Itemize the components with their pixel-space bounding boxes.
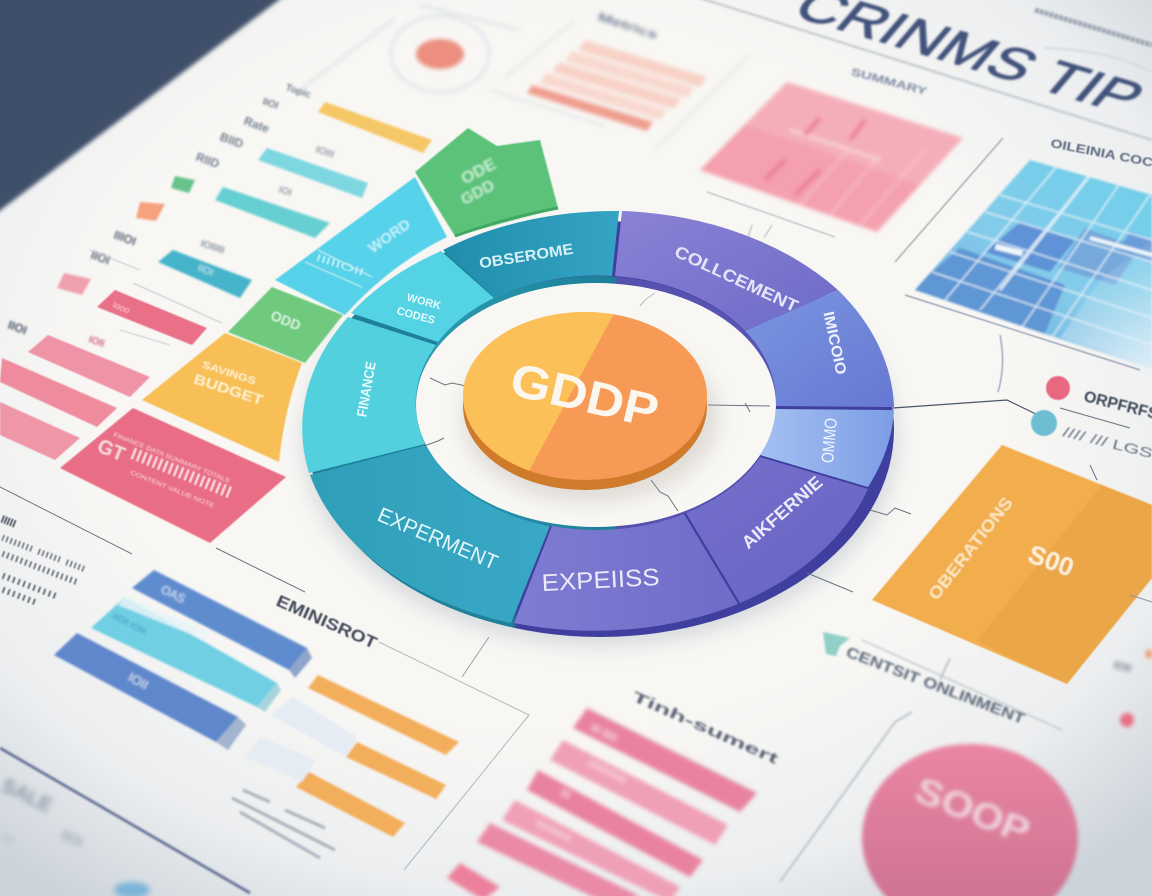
left labels column: IOI bbox=[277, 184, 293, 199]
label: cyan left: FINANCE bbox=[353, 360, 379, 418]
panel: large pink card: IIIIIIIIIIIIIIIIIII bbox=[128, 444, 235, 502]
left labels column: IIOI bbox=[6, 318, 29, 337]
panel: green lower tab: ODD bbox=[268, 307, 303, 334]
left labels column bbox=[6, 82, 336, 350]
panel: large pink card: GT bbox=[94, 435, 128, 466]
panel: pink list: IIIIIIIIIIIIII bbox=[534, 818, 573, 845]
left labels column: IIOI bbox=[261, 96, 280, 112]
bars: light pink bbox=[0, 250, 222, 460]
panel: pink list: III IIIII bbox=[589, 722, 619, 745]
left small icons bbox=[57, 176, 195, 295]
panel: green lower tab bbox=[228, 287, 343, 363]
left caption text: IIIIIIIIIIIIIIIII bbox=[0, 549, 79, 587]
panel: blue heat map bbox=[905, 160, 1152, 368]
segment: purple top right bbox=[615, 211, 838, 331]
bar: dark teal: IIOI bbox=[196, 263, 215, 279]
segment: teal bottom left bbox=[310, 445, 550, 623]
panel: pink heat map bbox=[700, 82, 963, 232]
title rule lines bbox=[700, 0, 1152, 140]
bar: teal bbox=[215, 187, 330, 238]
panel: pink list: IIIIIIIIIIIIIII bbox=[586, 758, 628, 787]
panel: blue bars: IOII bbox=[126, 669, 151, 692]
orange card connector bbox=[1130, 595, 1152, 602]
label: collcement: COLLCEMENT bbox=[672, 242, 802, 316]
bottom left blurred notes bbox=[0, 775, 150, 896]
left caption text bbox=[0, 514, 87, 607]
label: light blue: OMMO bbox=[818, 417, 841, 464]
label: expenses: EXPEIISS bbox=[541, 564, 660, 597]
icon: teal marker bbox=[823, 632, 850, 656]
label: teal: EXPERMENT bbox=[374, 503, 501, 575]
connector: lower right bbox=[870, 508, 911, 515]
bar: yellow bbox=[318, 102, 432, 153]
center disc: GDDP bbox=[460, 310, 718, 502]
label: periwinkle: IMICOIO bbox=[819, 310, 849, 376]
disc label: GDDP bbox=[506, 352, 664, 438]
segment: teal top bbox=[443, 211, 619, 298]
right edge blurred notes: IOII bbox=[1112, 659, 1132, 675]
panel: orange bars bbox=[232, 675, 459, 858]
right legend: //// /// LGS bbox=[1061, 423, 1152, 461]
ring inner wall bbox=[416, 276, 776, 530]
bar: light teal bbox=[258, 148, 368, 198]
segment: purple bottom bbox=[514, 514, 738, 631]
panel: cyan fan: WORD bbox=[365, 216, 414, 257]
panel: orange card bbox=[872, 445, 1152, 684]
icon: pink marker bbox=[1046, 376, 1070, 400]
segment: cyan left bbox=[302, 317, 436, 473]
panel: yellow trapezoid bbox=[142, 333, 302, 462]
blue panel label: OILEINIA COC bbox=[1049, 136, 1152, 170]
label: cyan upper: WORK bbox=[405, 292, 442, 312]
lines around bars bbox=[0, 487, 529, 870]
icon: blue dot bbox=[1031, 410, 1057, 436]
label: cyan upper bbox=[395, 292, 442, 327]
panel: lower right heading bbox=[823, 632, 1062, 730]
panel: blue bars: IIOII IOIII bbox=[111, 611, 148, 636]
pink panel label: SUMMARY bbox=[850, 66, 929, 98]
lower right axis line bbox=[780, 712, 912, 882]
pink panel axis lines bbox=[707, 138, 1003, 262]
left labels column: RIID bbox=[194, 150, 222, 171]
panel: salmon bars bbox=[490, 10, 750, 150]
panel: pink circle bbox=[862, 744, 1078, 896]
panel: large pink card: CONTENT VALUE NOTE bbox=[129, 470, 215, 510]
segment: purple lower right bbox=[686, 457, 868, 603]
left labels column: IOII bbox=[87, 334, 106, 350]
segment: light blue bbox=[760, 409, 894, 487]
bar: pink: Iooo bbox=[111, 300, 131, 315]
left labels column: BIID bbox=[218, 130, 246, 151]
donut ring bbox=[302, 211, 894, 637]
bottom left blurred notes: IIOI bbox=[59, 826, 86, 850]
sheet edge line bottom left bbox=[0, 748, 250, 893]
bar: dark teal bbox=[158, 250, 252, 298]
panel: blue bars bbox=[54, 570, 312, 750]
dark desk corner bbox=[0, 0, 292, 218]
left labels column: Topic bbox=[284, 82, 313, 101]
heading: Eminisrot: EMINISROT bbox=[273, 591, 380, 653]
panel: green top tab bbox=[415, 128, 558, 236]
panel: top circle gauge bbox=[300, 5, 520, 92]
panel: large pink card: FINANCE DATA SUMMARY TOTALS bbox=[112, 432, 230, 485]
left labels column: IOIII bbox=[314, 144, 336, 161]
blue panel axis lines bbox=[905, 295, 1140, 392]
panel: salmon bars: Metrics bbox=[596, 10, 660, 42]
panel: large pink card bbox=[60, 408, 286, 543]
left labels column: IOIIIII bbox=[199, 238, 226, 256]
hub connector lines bbox=[424, 293, 770, 511]
panel: cyan fan: IIIIIOII bbox=[314, 253, 365, 279]
panel: pink circle: SOOP bbox=[909, 769, 1036, 852]
panel: blue bars: OAS bbox=[159, 582, 188, 606]
disc edge bbox=[463, 322, 707, 490]
ring base edge bbox=[306, 221, 894, 637]
panel: lower right heading: CENTSIT ONLINMENT bbox=[844, 644, 1027, 728]
segment: periwinkle bbox=[745, 290, 894, 407]
panel: pink list bbox=[447, 708, 757, 896]
disc face bbox=[460, 310, 710, 485]
panel: orange card: S00 bbox=[1024, 539, 1078, 583]
panel: pink list: III bbox=[559, 787, 572, 802]
disc shadow bbox=[462, 334, 718, 502]
panel: green top tab: GDD bbox=[458, 177, 498, 209]
segment labels bbox=[353, 241, 849, 597]
connector: below ring bbox=[807, 573, 853, 592]
label: purple right: AIKFERNIE bbox=[738, 472, 826, 553]
panel: yellow trapezoid: BUDGET bbox=[192, 371, 266, 408]
label: top teal: OBSEROME bbox=[478, 241, 575, 272]
panel: orange card: OBERATIONS bbox=[925, 494, 1017, 604]
left labels column: IIIOI bbox=[112, 228, 138, 249]
heading: Tinh-sumert: Tinh-sumert bbox=[629, 688, 781, 768]
ring shadow bbox=[302, 234, 898, 646]
panel: yellow trapezoid: SAVINGS bbox=[200, 360, 257, 388]
left labels column: Rate bbox=[242, 114, 272, 136]
right connector line bbox=[893, 400, 1042, 417]
ring hole bbox=[416, 283, 776, 527]
panel: cyan fan bbox=[275, 177, 447, 315]
segment: cyan upper left bbox=[351, 251, 494, 342]
label: cyan upper: CODES bbox=[395, 305, 436, 327]
panel: green top tab: ODE bbox=[458, 154, 499, 188]
bar: pink bbox=[97, 290, 207, 345]
left labels column: IIOI bbox=[89, 248, 112, 267]
right edge blurred notes bbox=[1112, 650, 1152, 727]
left caption text: IIIIIIII IIIIII IIIII bbox=[0, 533, 87, 574]
right legend bbox=[1031, 376, 1152, 480]
left caption text: IIIIIIIIIII bbox=[0, 571, 59, 601]
